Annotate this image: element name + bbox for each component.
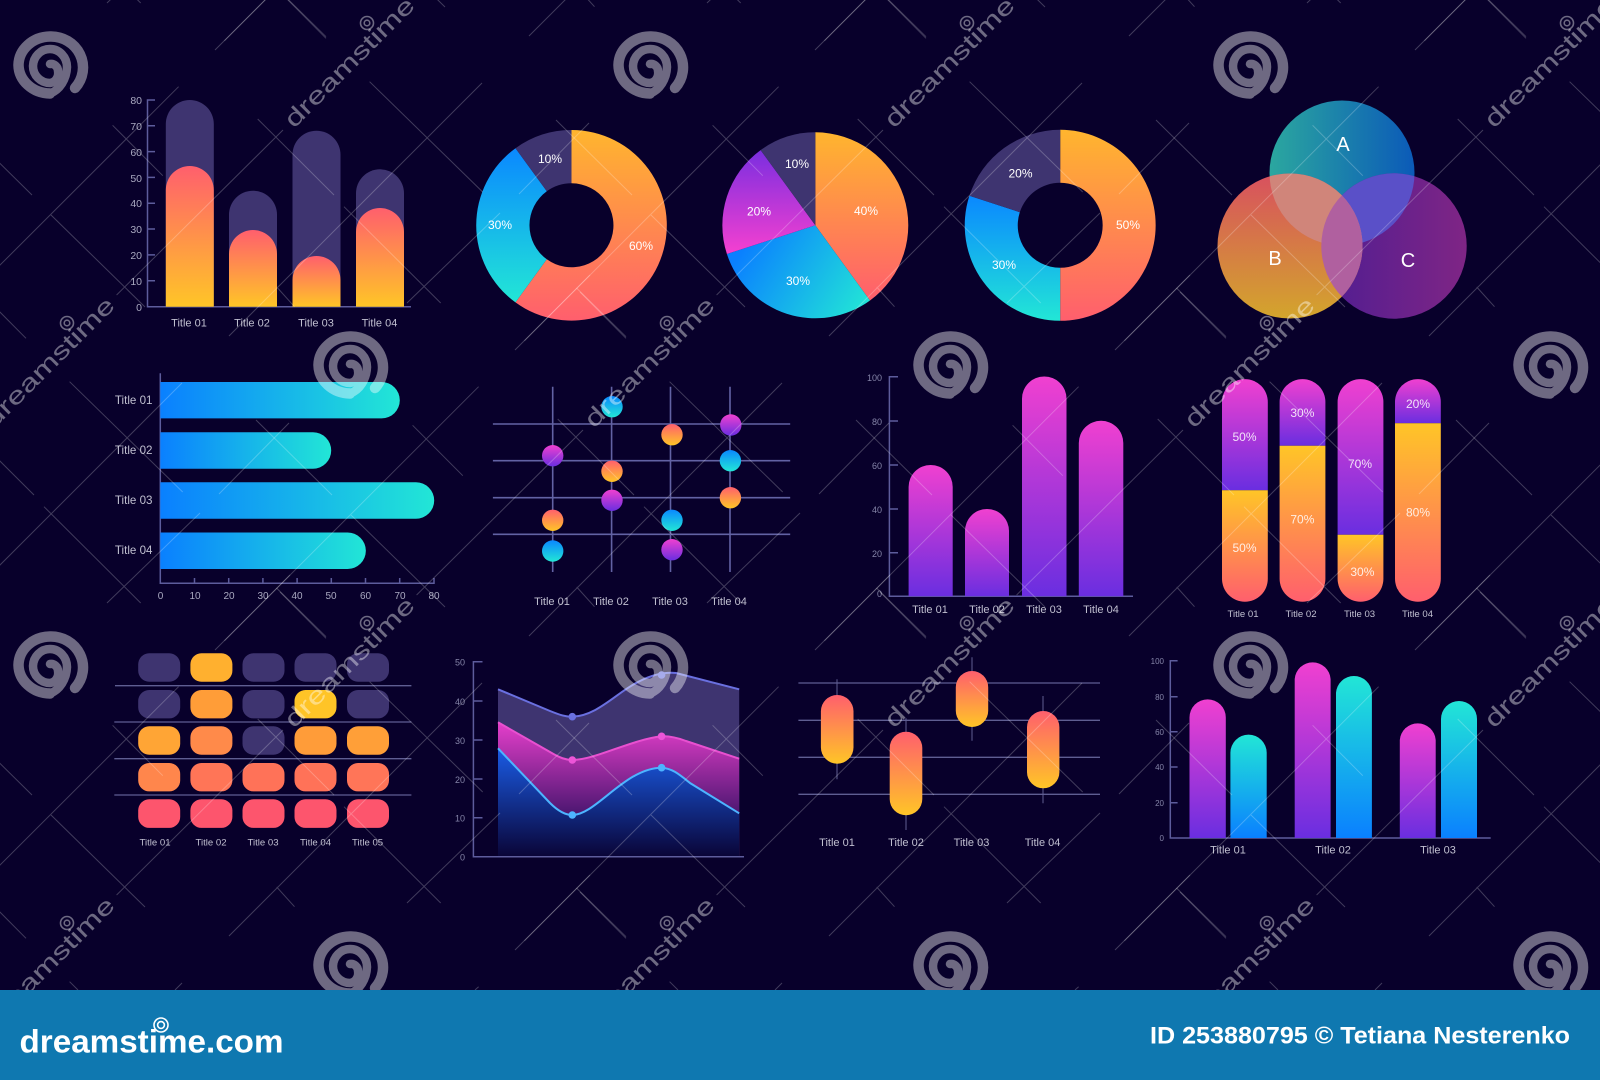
labels (534, 596, 747, 608)
labels: Title 02 (1285, 609, 1317, 620)
labels: Title 02 (969, 604, 1005, 616)
y axis labels: 30 (130, 224, 142, 236)
labels (1210, 844, 1456, 856)
whiskers (837, 657, 1043, 830)
tick labels: 100 (867, 373, 882, 383)
watermark: diagonal dreamstime text: dreamstime (879, 592, 1021, 733)
value axis labels: 10 (189, 591, 201, 602)
panel: heat grid (114, 653, 411, 848)
panel: purple bar chart (867, 373, 1133, 616)
capsule 2: 70% (1290, 512, 1315, 526)
value axis labels: 50 (325, 591, 337, 602)
value axis labels: 60 (360, 591, 371, 602)
image credit: ID 253880795 © Tetiana Nesterenko (1150, 1022, 1570, 1050)
x axis labels: Title 02 (234, 318, 270, 330)
labels: Title 03 (1420, 844, 1456, 856)
tick labels: 40 (872, 505, 882, 515)
y axis labels: 70 (130, 121, 142, 133)
y axis labels: 40 (130, 198, 142, 210)
footer logo text: dreamstime.com (20, 1024, 284, 1060)
capsule 3: 70% (1348, 457, 1372, 471)
labels: Title 01 (1210, 844, 1246, 856)
data points (568, 671, 665, 819)
capsule 3: 30% (1350, 565, 1375, 579)
value axis labels (158, 591, 440, 602)
labels: Title 04 (300, 838, 332, 848)
capsule 1 (1222, 379, 1268, 602)
top area (498, 673, 739, 856)
foreground bars (166, 166, 404, 307)
y axis labels: 0 (136, 302, 142, 314)
labels: Title 01 (534, 596, 570, 608)
panel: layered area chart (455, 658, 744, 862)
labels: Title 01 (819, 837, 855, 849)
category labels: Title 02 (115, 444, 152, 457)
value axis labels: 70 (394, 591, 406, 602)
labels: Title 01 (912, 604, 948, 616)
labels: Title 01 (1227, 609, 1259, 620)
panel: venn diagram: A (1336, 134, 1350, 156)
y axis labels: 50 (130, 173, 142, 185)
watermark: diagonal dreamstime text: dreamstime (1179, 292, 1321, 433)
watermark: small logo rings (60, 16, 1574, 930)
watermark: diagonal dreamstime text: dreamstime (579, 292, 721, 433)
labels: Title 03 (247, 838, 279, 848)
tick labels: 100 (1151, 657, 1165, 666)
category labels: Title 03 (115, 494, 152, 507)
labels: Title 04 (1025, 837, 1060, 849)
x axis labels: Title 01 (171, 318, 207, 330)
panel: pie chart (722, 132, 908, 318)
row 2 (138, 690, 389, 718)
axes (473, 662, 744, 857)
cyan bars (1230, 676, 1477, 838)
middle area (498, 722, 739, 856)
labels: Title 04 (1083, 604, 1119, 616)
category labels (115, 394, 153, 557)
tick labels: 30 (455, 736, 465, 746)
panel: candlestick chart (798, 657, 1100, 849)
watermark: diagonal dreamstime text: dreamstime (279, 592, 421, 733)
labels: Title 04 (711, 596, 747, 608)
capsule 1: 50% (1232, 430, 1257, 444)
capsule 2: 30% (1290, 406, 1315, 420)
value axis labels: 80 (428, 591, 440, 602)
panel: donut chart 60 30 10: 60% (629, 239, 653, 253)
labels: Title 03 (954, 837, 989, 849)
watermark: diagonal dreamstime text: dreamstime (579, 892, 721, 1033)
tick labels: 60 (872, 461, 882, 471)
capsule 4: 20% (1406, 397, 1430, 411)
tick labels: 50 (455, 658, 465, 668)
tick labels (455, 658, 465, 862)
row 1 (138, 653, 389, 682)
row 3 (138, 726, 389, 755)
category labels: Title 04 (115, 544, 153, 557)
panel: grouped bar chart (1151, 657, 1491, 856)
tick labels: 0 (1160, 834, 1165, 843)
tick labels: 0 (877, 589, 882, 599)
y axis labels: 60 (130, 147, 142, 159)
capsule 4 (1395, 379, 1441, 602)
labels: Title 01 (139, 838, 171, 848)
panel: dot matrix chart (493, 387, 790, 608)
background bars (166, 100, 404, 307)
y axis with ticks (148, 100, 411, 307)
y axis labels (130, 95, 142, 314)
panel: donut chart 50 30 20 (965, 130, 1156, 321)
capsule 2 (1280, 379, 1325, 602)
x axis labels (171, 318, 397, 330)
panel: donut chart 60 30 10 (476, 130, 667, 321)
panel: stacked rounded bar chart (130, 95, 411, 330)
watermark: diagonal dreamstime text: dreamstime (1479, 0, 1600, 133)
x axis labels: Title 04 (362, 318, 397, 330)
labels: Title 02 (1315, 844, 1351, 856)
labels: Title 03 (1344, 609, 1375, 620)
row lines (114, 686, 411, 795)
labels: Title 02 (593, 596, 629, 608)
value axis labels: 0 (158, 591, 164, 602)
labels: Title 05 (352, 838, 383, 848)
labels: Title 02 (195, 838, 227, 848)
tick labels (1151, 657, 1165, 843)
axes (889, 377, 1133, 596)
value axis labels: 30 (257, 591, 269, 602)
watermark: diagonal dreamstime text: dreamstime (1479, 592, 1600, 733)
panel: donut chart 60 30 10: 30% (488, 218, 512, 232)
panel: venn diagram: C (1401, 250, 1415, 272)
x axis labels: Title 03 (298, 318, 334, 330)
purple bars (1190, 662, 1436, 838)
tick labels: 80 (1155, 693, 1165, 702)
panel: venn diagram (1218, 100, 1467, 319)
category labels: Title 01 (115, 394, 152, 407)
bottom area (498, 748, 739, 856)
grid (493, 387, 790, 572)
footer logo spiral (154, 1018, 168, 1032)
row 5 (138, 799, 389, 828)
y axis labels: 20 (130, 250, 142, 262)
y axis labels: 80 (130, 95, 142, 107)
bars (160, 382, 434, 569)
grid lines (798, 683, 1100, 794)
value axis labels: 40 (291, 591, 303, 602)
watermark: diagonal dreamstime text: dreamstime (279, 0, 421, 133)
watermark: diagonal dreamstime text: dreamstime (1179, 892, 1321, 1033)
capsule 3 (1338, 379, 1383, 602)
labels (1227, 609, 1434, 620)
tick labels: 20 (872, 549, 882, 559)
labels (139, 838, 383, 848)
labels: Title 02 (888, 837, 924, 849)
labels: Title 03 (652, 596, 688, 608)
panel: pie chart: 10% (785, 157, 809, 171)
watermark: diagonal dreamstime text: dreamstime (879, 0, 1021, 133)
panel: donut chart 50 30 20: 50% (1116, 218, 1140, 232)
tick labels: 40 (455, 697, 465, 707)
tick labels: 20 (455, 775, 465, 785)
y axis labels: 10 (130, 276, 142, 288)
tick labels (867, 373, 882, 599)
panel: horizontal bar chart (115, 373, 440, 602)
area outlines (498, 673, 739, 815)
labels: Title 03 (1026, 604, 1062, 616)
capsule 1: 50% (1232, 541, 1257, 555)
panel: donut chart 50 30 20: 30% (992, 258, 1016, 272)
labels: Title 04 (1402, 609, 1434, 620)
footer bar (0, 990, 1600, 1080)
tick labels: 60 (1155, 728, 1165, 737)
bars (909, 376, 1123, 596)
axes and ticks (160, 373, 434, 583)
tick labels: 40 (1155, 763, 1165, 772)
tick labels: 80 (872, 417, 882, 427)
row 4 (138, 763, 389, 791)
axes (1170, 661, 1491, 838)
panel: pie chart: 30% (786, 274, 810, 288)
panel: pie chart: 40% (854, 204, 878, 218)
panel: donut chart 50 30 20: 20% (1008, 166, 1033, 180)
tick labels: 0 (460, 852, 465, 862)
panel: stacked capsule chart (1222, 379, 1441, 620)
capsule 4: 80% (1406, 506, 1430, 520)
tick labels: 20 (1155, 799, 1165, 808)
panel: pie chart: 20% (747, 204, 771, 218)
panel: donut chart 60 30 10: 10% (538, 152, 562, 166)
tick labels: 10 (455, 814, 465, 824)
panel: venn diagram: B (1268, 248, 1282, 270)
dots (542, 396, 742, 562)
labels (912, 604, 1119, 616)
value axis labels: 20 (223, 591, 235, 602)
labels (819, 837, 1060, 849)
candles (821, 671, 1059, 815)
